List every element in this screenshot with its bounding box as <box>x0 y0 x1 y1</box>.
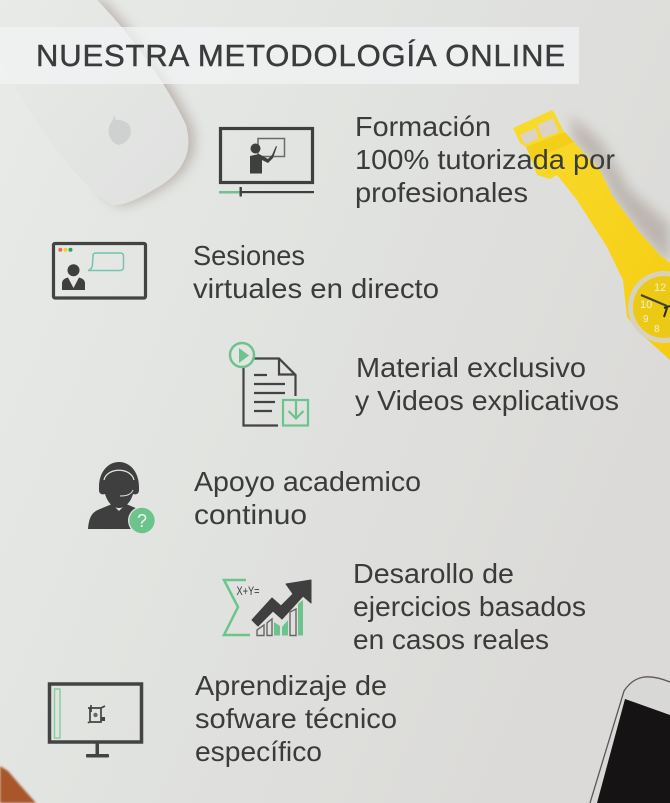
text: academic support <box>194 466 421 530</box>
text: live virtual sessions: Sesiones <box>193 240 305 271</box>
text: case-based exercises: en casos reales <box>353 624 549 655</box>
icon: desktop monitor with crop tool <box>50 684 142 758</box>
icon: formula and growth chart: X+Y= <box>236 586 260 598</box>
photo: white mouse <box>0 0 194 205</box>
photo: yellow watch: 10 <box>640 299 652 311</box>
text: case-based exercises: ejercicios basados <box>353 591 586 622</box>
icon: video call window <box>54 244 146 298</box>
item 3: exclusive material <box>230 343 619 426</box>
text: exclusive material <box>355 352 619 416</box>
title: NUESTRA METODOLOGÍA ONLINE <box>36 38 565 73</box>
text: technical software: específico <box>195 736 322 767</box>
text: exclusive material: Material exclusivo <box>356 352 586 383</box>
text: live virtual sessions: virtuales en directo <box>193 273 439 304</box>
text: technical software <box>195 670 397 767</box>
text: tutored training <box>355 111 615 208</box>
icon: presentation screen <box>219 128 314 196</box>
photo: yellow watch: 8 <box>654 324 660 335</box>
text: tutored training: Formación <box>355 111 491 142</box>
text: exclusive material: y Videos explicativos <box>355 385 619 416</box>
text: case-based exercises <box>353 558 586 655</box>
icon: document with play and download <box>230 343 308 426</box>
icon: formula and growth chart <box>224 580 311 636</box>
text: academic support: Apoyo academico <box>194 466 421 497</box>
photo: yellow watch: 12 <box>654 282 666 294</box>
item 6: technical software <box>50 670 397 767</box>
item 5: case-based exercises <box>224 558 586 655</box>
text: tutored training: 100% tutorizada por <box>355 144 615 175</box>
item 2: live virtual sessions <box>54 240 439 304</box>
text: technical software: sofware técnico <box>195 703 397 734</box>
text: technical software: Aprendizaje de <box>195 670 387 701</box>
photo: smartphone <box>590 677 670 803</box>
text: live virtual sessions <box>193 240 439 304</box>
text: tutored training: profesionales <box>355 177 528 208</box>
icon: support agent with headset <box>88 462 156 534</box>
photo: yellow watch: 9 <box>643 314 649 325</box>
text: case-based exercises: Desarollo de <box>353 558 514 589</box>
item 1: tutored training <box>219 111 615 208</box>
text: academic support: continuo <box>194 499 307 530</box>
icon: support agent with headset: ? <box>137 511 147 531</box>
photo: yellow watch <box>513 110 670 360</box>
item 4: academic support <box>88 462 421 534</box>
title <box>0 27 579 84</box>
